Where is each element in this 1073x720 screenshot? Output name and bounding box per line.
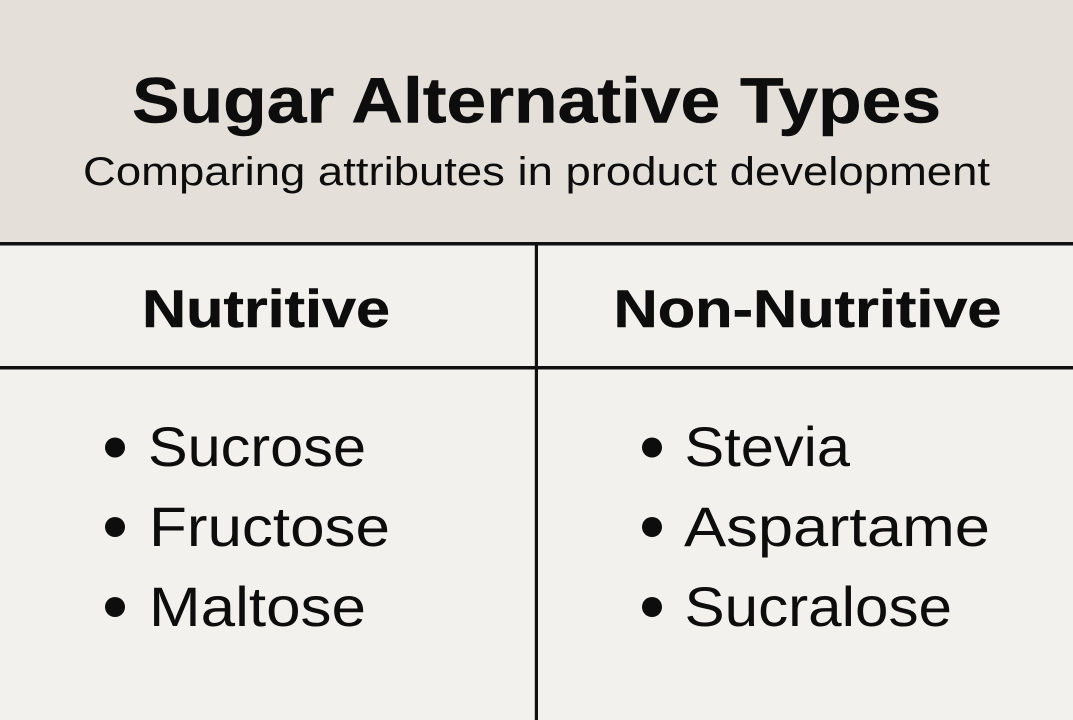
- subtitle: Comparing attributes in product development: [83, 150, 990, 194]
- column heading: Nutritive: Nutritive: [142, 280, 390, 339]
- column: Nutritive: [105, 280, 390, 638]
- title: Sugar Alternative Types: [132, 64, 941, 136]
- list: nutritive sweeteners: [105, 415, 390, 638]
- table grid lines: [0, 242, 1073, 720]
- list item: Fructose: Fructose: [149, 495, 390, 558]
- list item: Maltose: Maltose: [149, 575, 366, 638]
- list item: Sucrose: Sucrose: [148, 415, 366, 478]
- list item: Sucralose: Sucralose: [684, 575, 952, 638]
- header panel: [0, 0, 1073, 243]
- list item: Stevia: Stevia: [684, 415, 851, 478]
- column heading: Non-Nutritive: Non-Nutritive: [614, 280, 1002, 339]
- column: Non-Nutritive: [614, 280, 1002, 638]
- list: non-nutritive sweeteners: [642, 415, 990, 638]
- list item: Aspartame: Aspartame: [684, 495, 990, 558]
